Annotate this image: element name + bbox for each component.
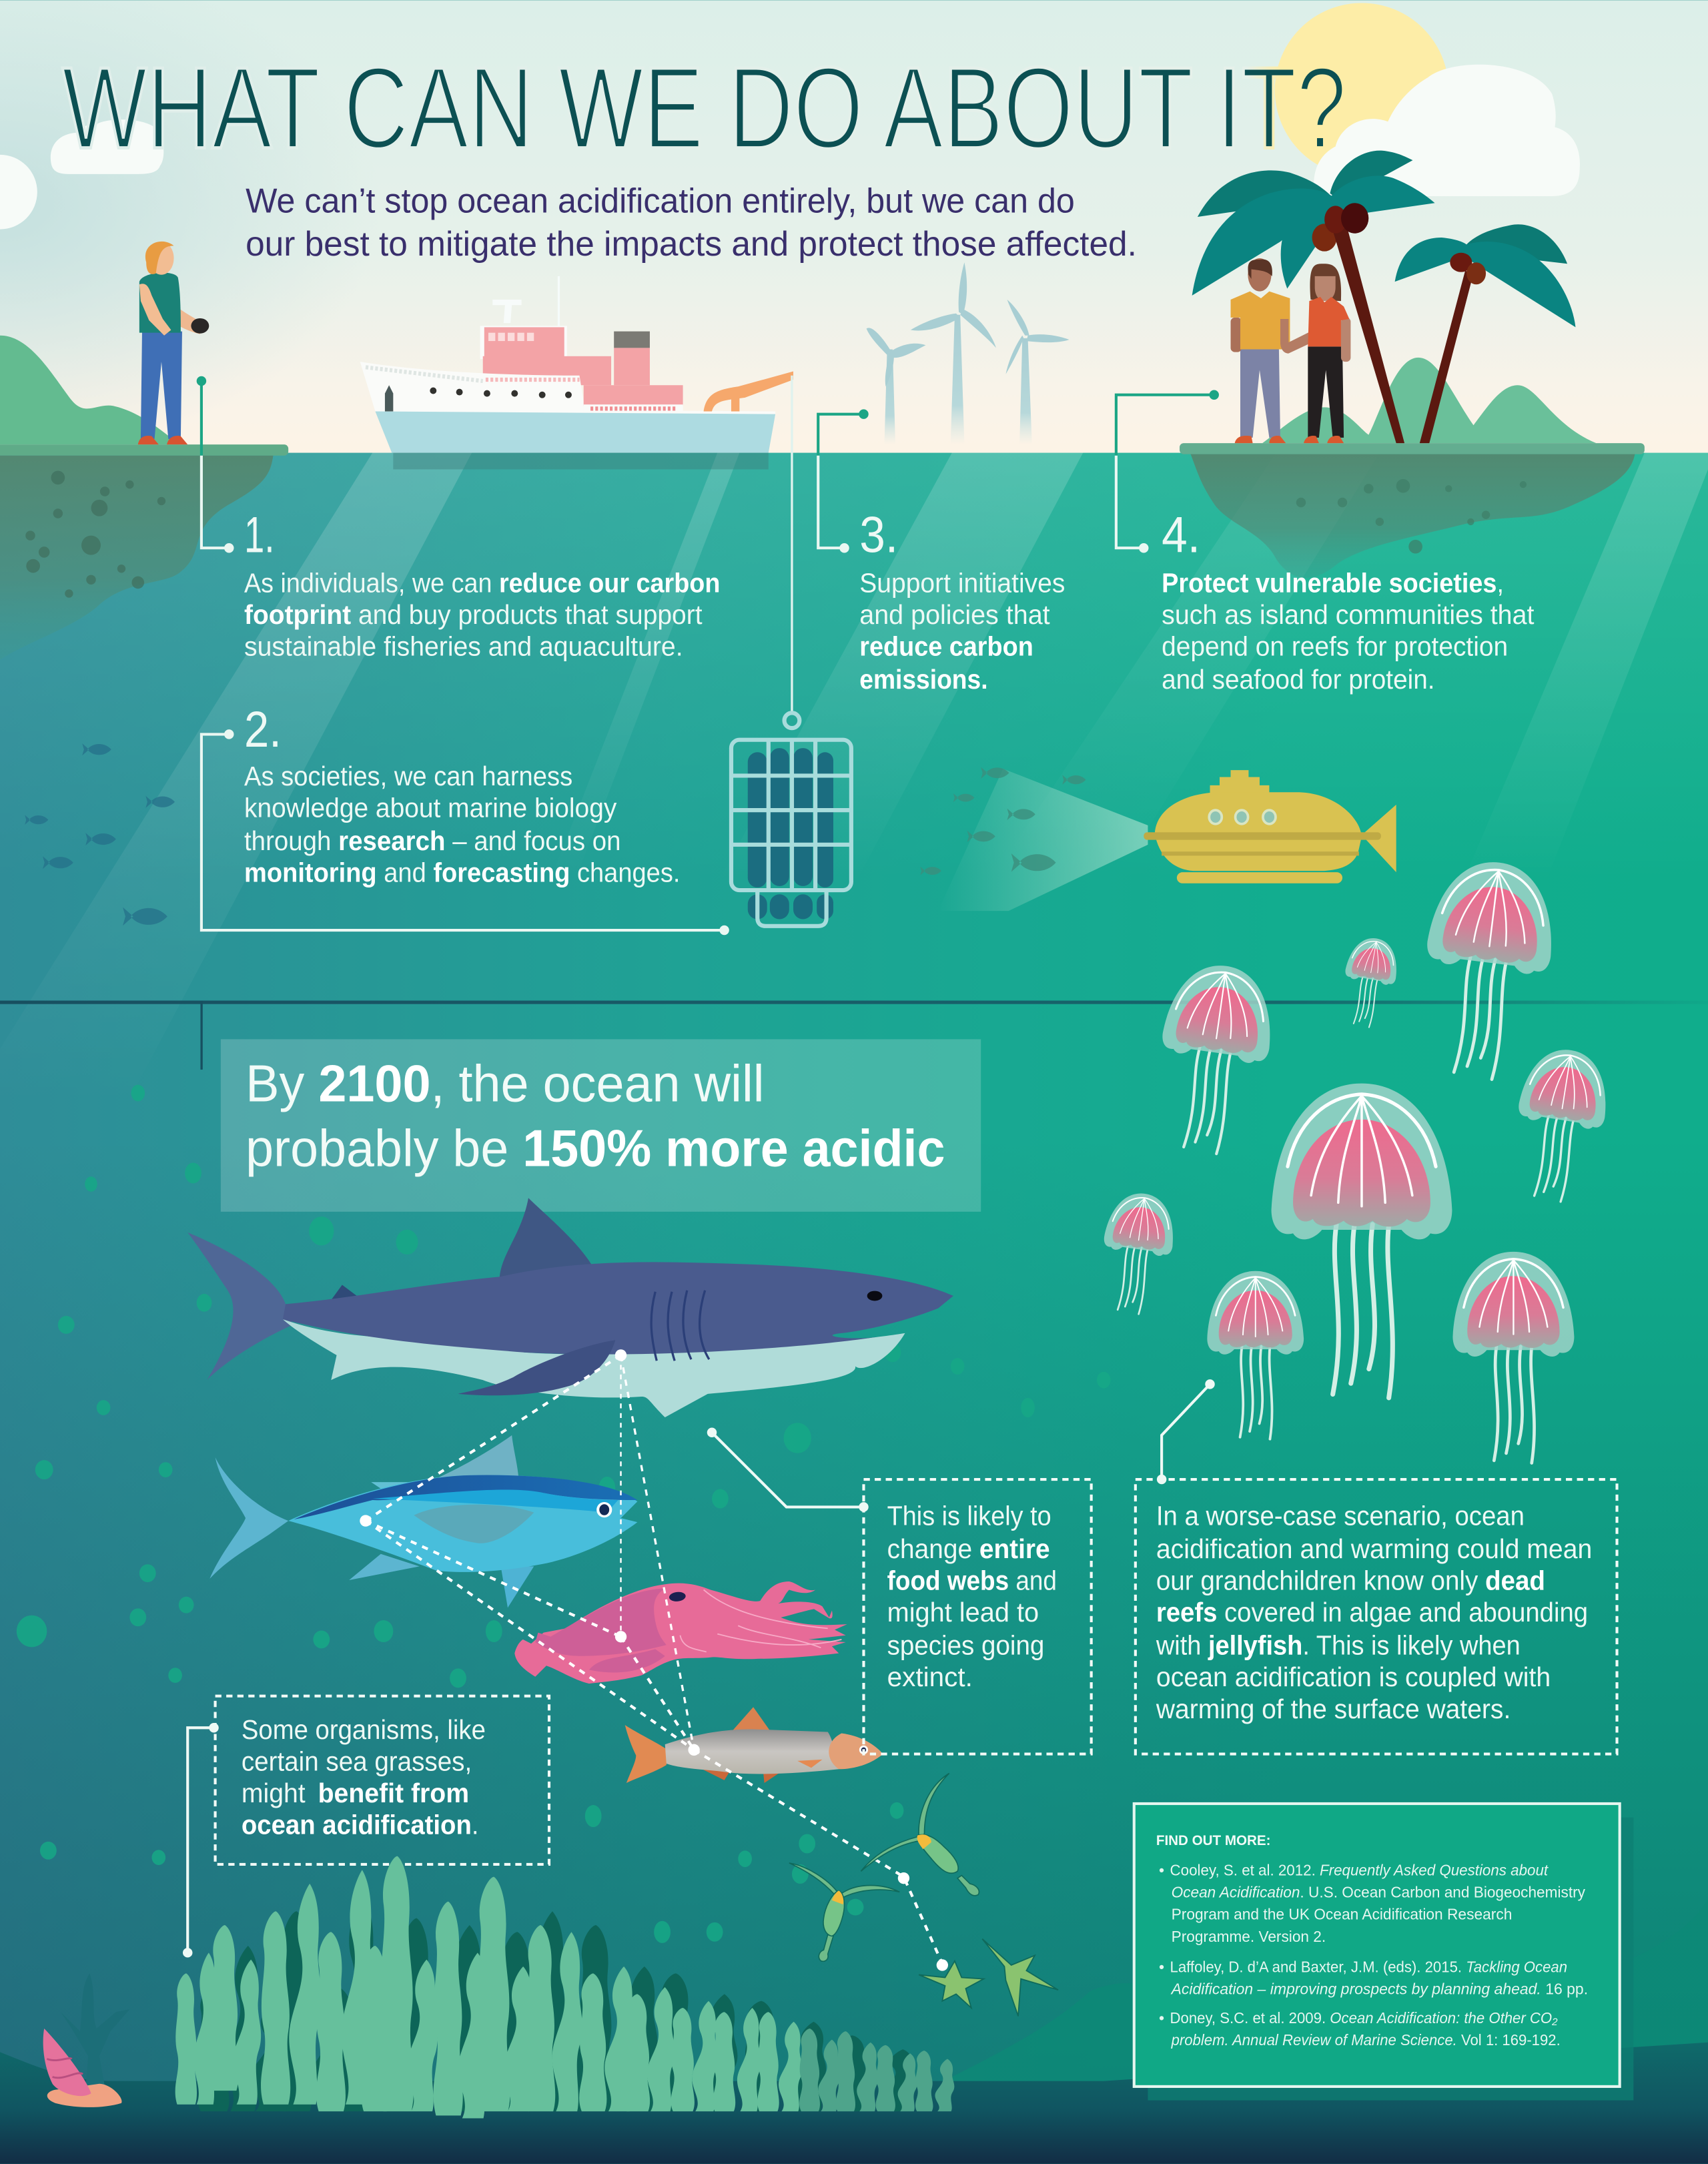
panel: find out more: Programme. Version 2. xyxy=(1172,1928,1326,1945)
dashed box: sea grasses xyxy=(216,1696,549,1864)
intro text xyxy=(246,182,1137,263)
palm trees xyxy=(1192,151,1575,443)
person: man on the left island xyxy=(138,242,209,444)
step 1 text: As individuals, we can reduce our carbon xyxy=(244,567,720,598)
ship xyxy=(360,276,793,469)
dashed box: worst case: reefs covered in algae and abounding xyxy=(1156,1597,1588,1628)
connector: step 4 xyxy=(1116,390,1219,553)
callout: 2100 forecast: probably be 150% more acidic xyxy=(246,1120,945,1178)
clouds xyxy=(0,65,1580,230)
left island with hills xyxy=(0,336,288,660)
couple xyxy=(1231,258,1350,443)
plankton star A xyxy=(919,1961,983,2008)
panel: find out more: Cooley, S. et al. 2012. Frequently Asked Questions about xyxy=(1170,1862,1549,1879)
callout: 2100 forecast xyxy=(221,1039,981,1212)
panel: find out more: Acidification – improving prospects by planning ahead. 16 pp. xyxy=(1170,1980,1588,1997)
panel: find out more: Program and the UK Ocean Acidification Research xyxy=(1172,1906,1512,1923)
step 4 text: 4. xyxy=(1162,506,1200,563)
background: sky xyxy=(0,0,1708,456)
dashed box: worst case: our grandchildren know only dead xyxy=(1156,1565,1545,1595)
icon: bubbles xyxy=(17,1085,1111,1943)
connectors: callouts xyxy=(707,1379,1215,1512)
food web dashed links xyxy=(360,1349,948,1971)
step 4 text: Protect vulnerable societies, xyxy=(1162,567,1504,598)
submarine xyxy=(1144,770,1396,883)
step 1 text: 1. xyxy=(244,506,275,563)
dashed box: worst case: ocean acidification is coupled with xyxy=(1156,1662,1551,1692)
step 3 text: 3. xyxy=(859,506,898,563)
step 1 text: footprint and buy products that support xyxy=(244,599,703,630)
panel: find out more: Doney, S.C. et al. 2009. Ocean Acidification: the Other CO₂ xyxy=(1170,2009,1558,2027)
connector: step 2 xyxy=(201,729,729,935)
panel: find out more: • xyxy=(1159,1862,1164,1879)
seafloor hills xyxy=(0,1899,1708,2164)
step 2 text: through research – and focus on xyxy=(244,825,621,856)
copepod B xyxy=(789,1863,899,1961)
plankton star B xyxy=(982,1939,1058,2016)
step 1 text: sustainable fisheries and aquaculture. xyxy=(244,631,683,662)
shark xyxy=(187,1198,953,1417)
dashed box: sea grasses: ocean acidification. xyxy=(242,1809,479,1840)
dashed box: food webs: change entire xyxy=(887,1533,1050,1564)
sea grass xyxy=(175,1856,954,2118)
intro text: our best to mitigate the impacts and protect those affected. xyxy=(246,224,1137,263)
connector: winch cable to cage xyxy=(785,376,799,728)
step 4 text xyxy=(1162,506,1534,695)
depth ruler xyxy=(0,1000,1708,1070)
dashed box: food webs: species going xyxy=(887,1630,1044,1661)
dashed box: food webs: extinct. xyxy=(887,1662,973,1692)
step 3 text: reduce carbon xyxy=(859,631,1033,662)
icon: snail xyxy=(43,2029,122,2107)
step 4 text: depend on reefs for protection xyxy=(1162,631,1508,662)
panel: find out more: FIND OUT MORE: xyxy=(1156,1832,1270,1848)
connector: sea grass xyxy=(183,1723,219,1958)
icon: school of fish, left xyxy=(25,743,175,926)
icon: coral xyxy=(61,1973,129,2087)
panel: find out more: • xyxy=(1159,2009,1164,2027)
step 2 text: As societies, we can harness xyxy=(244,761,572,791)
step 2 text xyxy=(244,701,680,888)
step 2 text: 2. xyxy=(244,701,282,758)
panel: find out more xyxy=(1134,1804,1633,2101)
dashed box: worst case: acidification and warming could mean xyxy=(1156,1533,1592,1564)
step 4 text: and seafood for protein. xyxy=(1162,664,1435,695)
dashed box: food webs: might lead to xyxy=(887,1597,1039,1628)
panel: find out more: Ocean Acidification. U.S. Ocean Carbon and Biogeochemistry xyxy=(1172,1884,1585,1901)
background: ocean xyxy=(0,453,1708,2164)
panel: find out more: problem. Annual Review of Marine Science. Vol 1: 169-192. xyxy=(1171,2031,1561,2049)
step 2 text: knowledge about marine biology xyxy=(244,792,617,823)
tuna xyxy=(209,1435,637,1607)
dashed box: food webs xyxy=(863,1479,1092,1754)
light beam from submarine xyxy=(938,769,1148,911)
dashed box: worst case: with jellyfish. This is likely when xyxy=(1156,1630,1521,1661)
dashed box: food webs: This is likely to xyxy=(887,1500,1051,1531)
icon: sun xyxy=(1275,3,1448,177)
step 2 text: monitoring and forecasting changes. xyxy=(244,857,680,888)
connector: step 1 xyxy=(197,376,234,553)
wind turbines xyxy=(867,262,1070,444)
icon: school of fish in beam xyxy=(920,767,1086,875)
dashed box: sea grasses: certain sea grasses, xyxy=(242,1746,472,1776)
small fish xyxy=(625,1707,883,1783)
copepod A xyxy=(861,1773,979,1896)
connector: step 3 xyxy=(818,409,869,553)
dashed box: sea grasses: Some organisms, like xyxy=(242,1714,486,1745)
dashed box: worst case: warming of the surface waters. xyxy=(1156,1694,1511,1724)
step 3 text: and policies that xyxy=(859,599,1050,630)
icon: monitoring cage xyxy=(731,740,851,926)
squid xyxy=(514,1581,847,1684)
step 1 text xyxy=(244,506,720,662)
step 4 text: such as island communities that xyxy=(1162,599,1534,630)
dashed box: sea grasses: might benefit from xyxy=(242,1778,469,1808)
step 3 text: emissions. xyxy=(859,664,988,695)
dashed box: worst case: In a worse-case scenario, ocean xyxy=(1156,1500,1525,1531)
step 3 text xyxy=(859,506,1065,695)
dashed box: worst case xyxy=(1136,1479,1617,1754)
panel: find out more: • xyxy=(1159,1958,1164,1975)
panel: find out more: Laffoley, D. d’A and Baxter, J.M. (eds). 2015. Tackling Ocean xyxy=(1170,1958,1567,1975)
jellyfish group xyxy=(1094,855,1615,1463)
dashed box: food webs: food webs and xyxy=(887,1565,1057,1595)
intro text: We can’t stop ocean acidification entirely, but we can do xyxy=(246,182,1075,220)
right island with hills xyxy=(1180,358,1645,578)
callout: 2100 forecast: By 2100, the ocean will xyxy=(246,1055,765,1112)
title: WHAT CAN WE DO ABOUT IT? xyxy=(62,43,1346,173)
step 3 text: Support initiatives xyxy=(859,567,1065,598)
